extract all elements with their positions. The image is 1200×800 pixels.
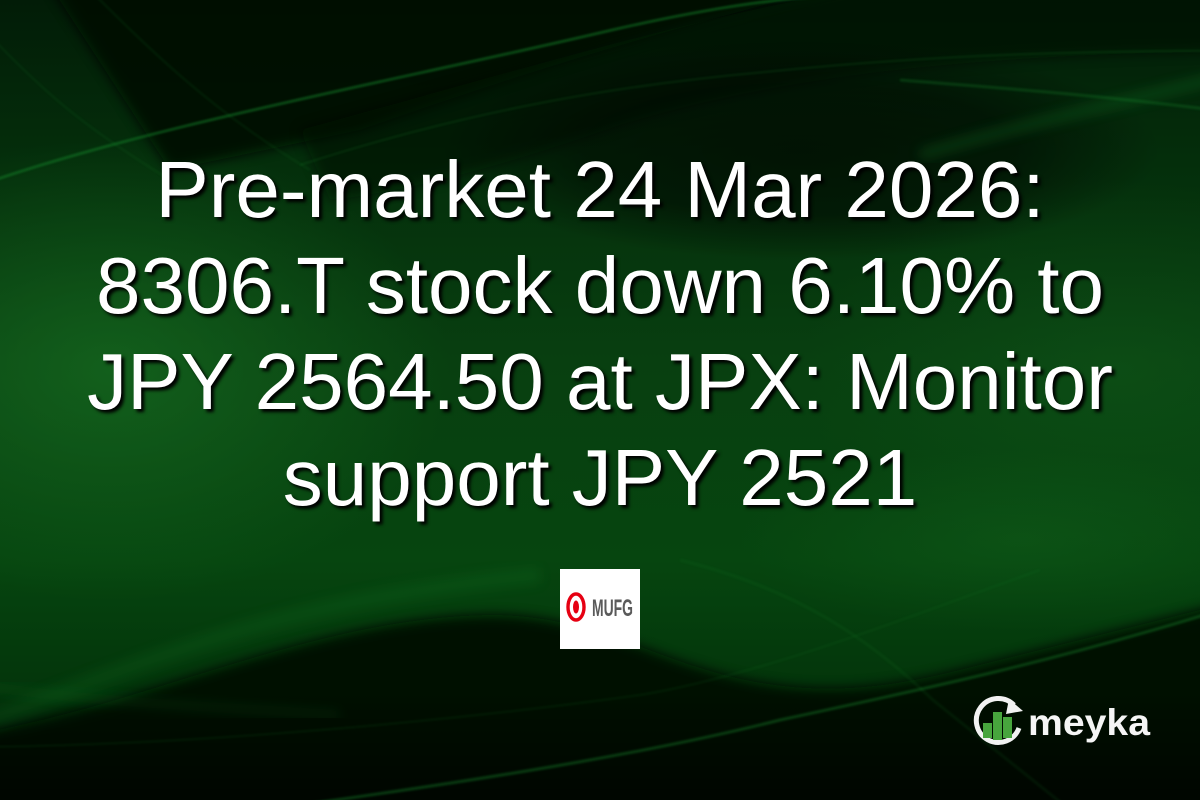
- logo: MUFG: [560, 569, 640, 649]
- top dark zones: [40, 0, 900, 170]
- title: support JPY 2521: [283, 433, 917, 522]
- icon: circular arrow with bars: [976, 698, 1023, 742]
- title: JPY 2564.50 at JPX: Monitor: [87, 337, 1113, 426]
- bottom dark hump: [0, 600, 1200, 800]
- title: [87, 145, 1116, 526]
- wordmark: meyka: [1028, 702, 1150, 743]
- title: 8306.T stock down 6.10% to: [96, 241, 1104, 330]
- brand: meyka logo: [974, 696, 1150, 745]
- title: Pre-market 24 Mar 2026:: [155, 145, 1045, 234]
